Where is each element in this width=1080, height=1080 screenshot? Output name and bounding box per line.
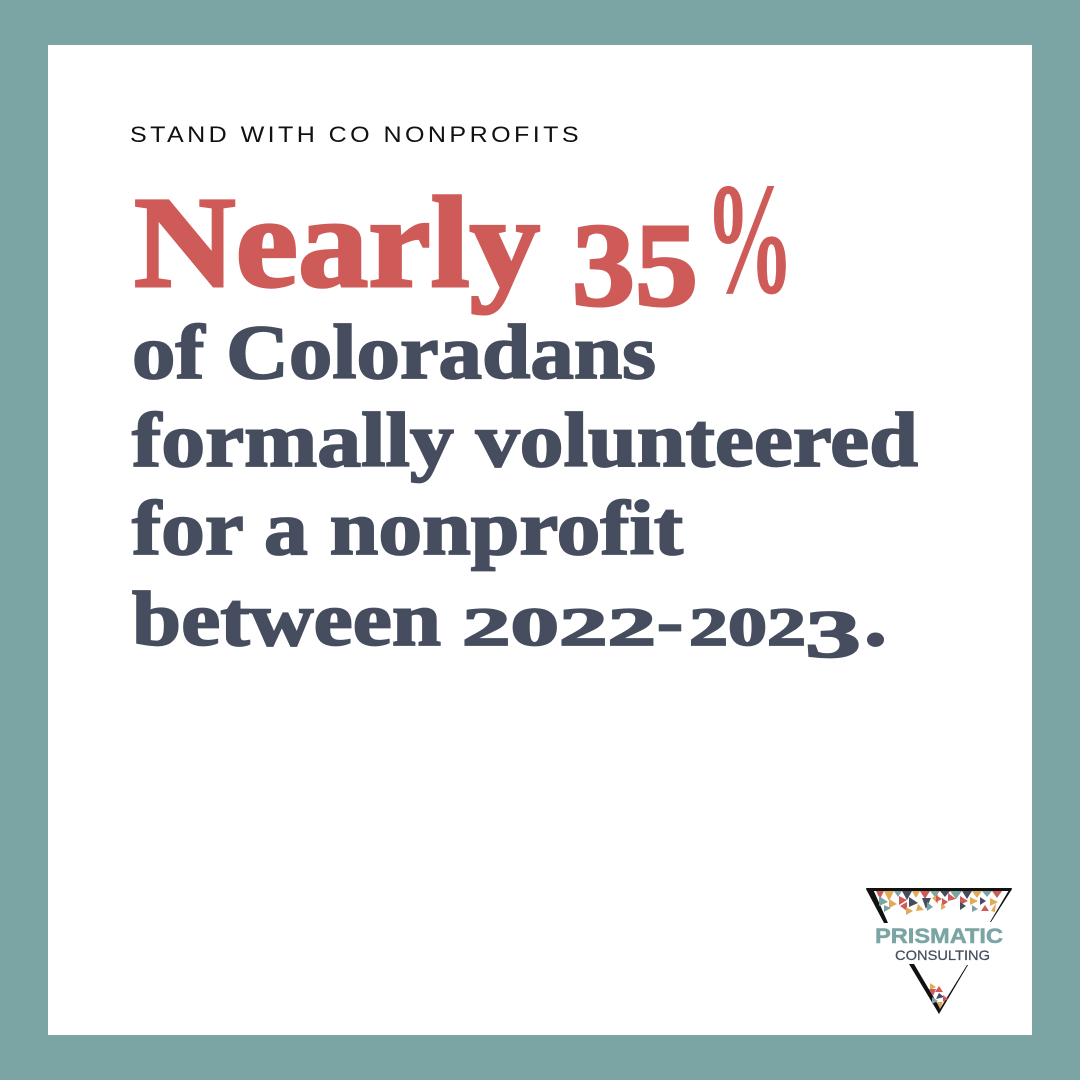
statement text: of Coloradans bbox=[132, 309, 656, 395]
headline: Nearly 35% bbox=[134, 151, 794, 331]
icon: confetti triangles bbox=[876, 891, 1002, 1009]
statement text: for a nonprofit bbox=[132, 485, 683, 571]
statement text: between bbox=[132, 576, 441, 662]
icon: inverted triangle outline bbox=[866, 888, 1012, 1014]
statement text: . bbox=[864, 576, 887, 662]
statement text: 3 bbox=[805, 596, 861, 672]
statement text: 2022 bbox=[462, 597, 656, 657]
headline: Nearly 35%: Nearly bbox=[134, 171, 540, 315]
logo: Prismatic Consulting bbox=[866, 888, 1012, 1014]
statement text: 202 bbox=[689, 597, 806, 657]
statement text: formally volunteered bbox=[132, 397, 918, 483]
headline: Nearly 35%: 35 bbox=[572, 199, 698, 331]
logo wordmark: PRISMATIC: PRISMATIC bbox=[875, 925, 1003, 948]
logo wordmark: CONSULTING: CONSULTING bbox=[895, 947, 990, 963]
headline: Nearly 35%: % bbox=[705, 151, 794, 327]
eyebrow heading: STAND WITH CO NONPROFITS bbox=[130, 122, 582, 147]
statement text bbox=[132, 309, 918, 672]
statement text: - bbox=[657, 586, 683, 657]
